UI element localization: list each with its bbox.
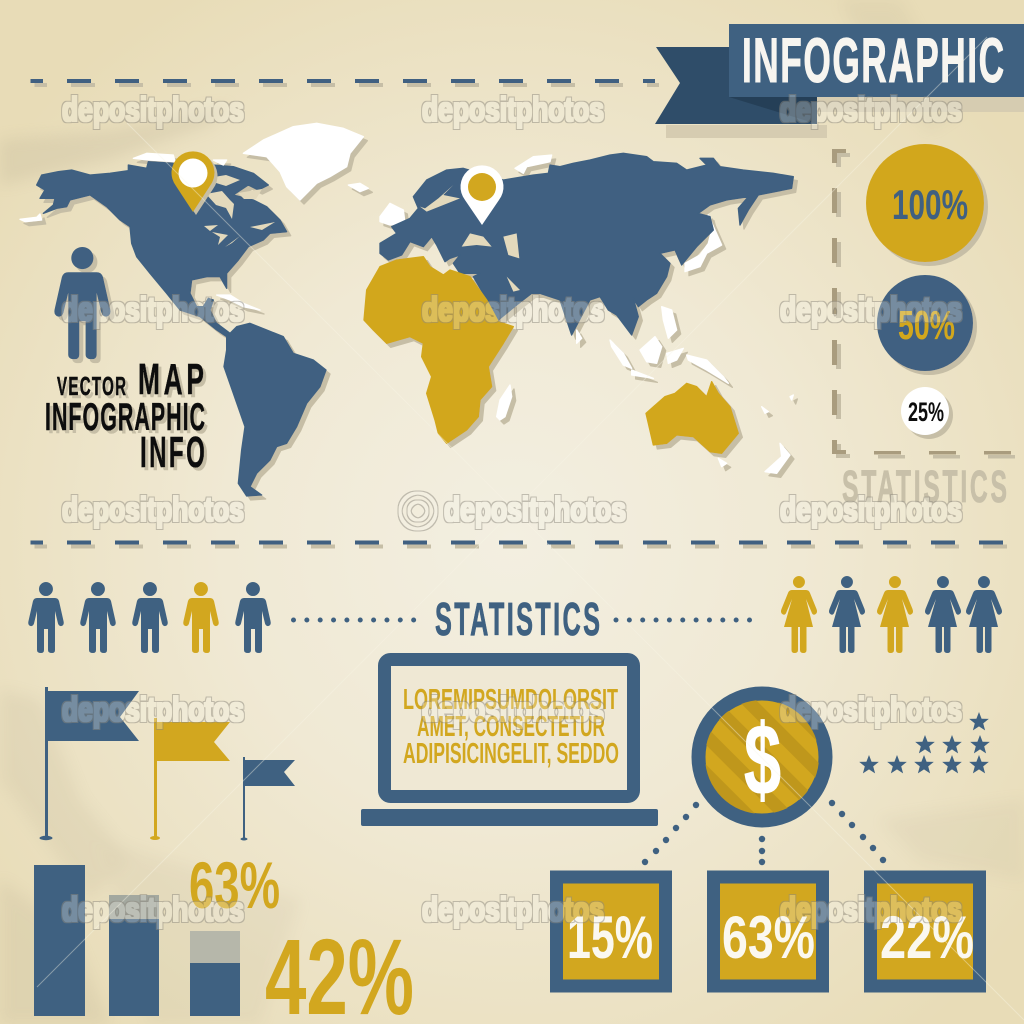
hudson bay and great lakes cutouts [204,175,275,247]
coin stripes [706,700,819,814]
box: 15% [556,877,666,986]
laptop [361,660,658,826]
laptop screen text: ADIPISICINGELIT, SEDDO [403,738,619,770]
watermarks: depositphotos [444,491,626,529]
icon: large person [54,247,110,359]
inland seas cutouts [420,185,520,292]
world map [20,123,793,496]
watermarks: depositphotos [62,691,244,729]
flag: large blue [40,687,139,840]
circle: 100%: 100% [892,181,968,228]
top dashed divider [30,79,655,83]
dollar sign: $ [744,704,781,816]
flag: medium gold [150,718,230,840]
dotted line right [616,618,756,622]
watermarks: depositphotos [780,891,962,929]
map pin: white [461,165,504,225]
watermarks: depositphotos [422,291,604,329]
men pictogram row [28,582,271,653]
dotted connectors [642,800,886,865]
watermarks: depositphotos [62,291,244,329]
watermarks: depositphotos [62,891,244,929]
eurasia [380,153,793,335]
circle: 50% [877,275,973,371]
bar 1 [34,865,85,1016]
south america [224,323,326,496]
watermarks: depositphotos [780,491,962,529]
heading: vector map infographic info: INFO [140,427,205,477]
box: 22%: 22% [880,904,974,971]
box: 15%: 15% [567,904,653,971]
circle: 25%: 25% [908,397,944,427]
central heading: statistics: STATISTICS [435,593,600,645]
statistics panel bracket [832,149,1011,454]
australia [646,382,738,453]
box: 22% [870,877,980,986]
box: 63% [714,877,822,986]
heading: vector map infographic info: INFOGRAPHIC [45,395,205,439]
watermarks: depositphotos [780,691,962,729]
bar 3 [190,931,240,1016]
percentage: 63%: 63% [189,848,280,922]
bar 2 [109,895,159,1016]
bottom dashed divider [30,540,1005,544]
heading: vector map infographic info [45,354,205,477]
watermarks: depositphotos [422,691,604,729]
watermarks: depositphotos [62,491,244,529]
map pin: gold [172,151,214,212]
title text: INFOGRAPHIC [742,25,1004,96]
stars [859,712,990,773]
dotted line left [294,618,418,622]
circle: 25% [901,387,949,435]
box: 63%: 63% [722,904,815,971]
circle: 50%: 50% [898,302,955,348]
title ribbon [655,24,1024,138]
women pictogram row [781,576,1002,653]
laptop screen text: AMET, CONSECTETUR [417,711,605,743]
bar chart [34,865,240,1016]
flag: small blue [240,757,295,840]
heading: vector map infographic info: VECTOR [57,372,126,401]
watermarks: depositphotos [422,91,604,129]
dollar coin [670,642,877,849]
circle: 100% [866,144,984,262]
africa [364,257,513,443]
watermarks: depositphotos [422,891,604,929]
americas and greenland [20,123,368,496]
flags [40,687,295,840]
watermarks: depositphotos [62,91,244,129]
watermarks: depositphotos [780,91,962,129]
islands [380,155,793,473]
laptop screen text: LOREMIPSUMDOLORSIT [403,684,618,716]
laptop screen text [403,684,619,770]
greenland [243,123,363,200]
watermarks [62,91,962,929]
watermarks: depositphotos [780,291,962,329]
arctic and caribbean islands [20,153,368,310]
north america [37,162,287,337]
heading: vector map infographic info: MAP [138,354,204,404]
statistics panel label: STATISTICS [842,461,1007,512]
eurasia, africa, australia [364,153,793,473]
